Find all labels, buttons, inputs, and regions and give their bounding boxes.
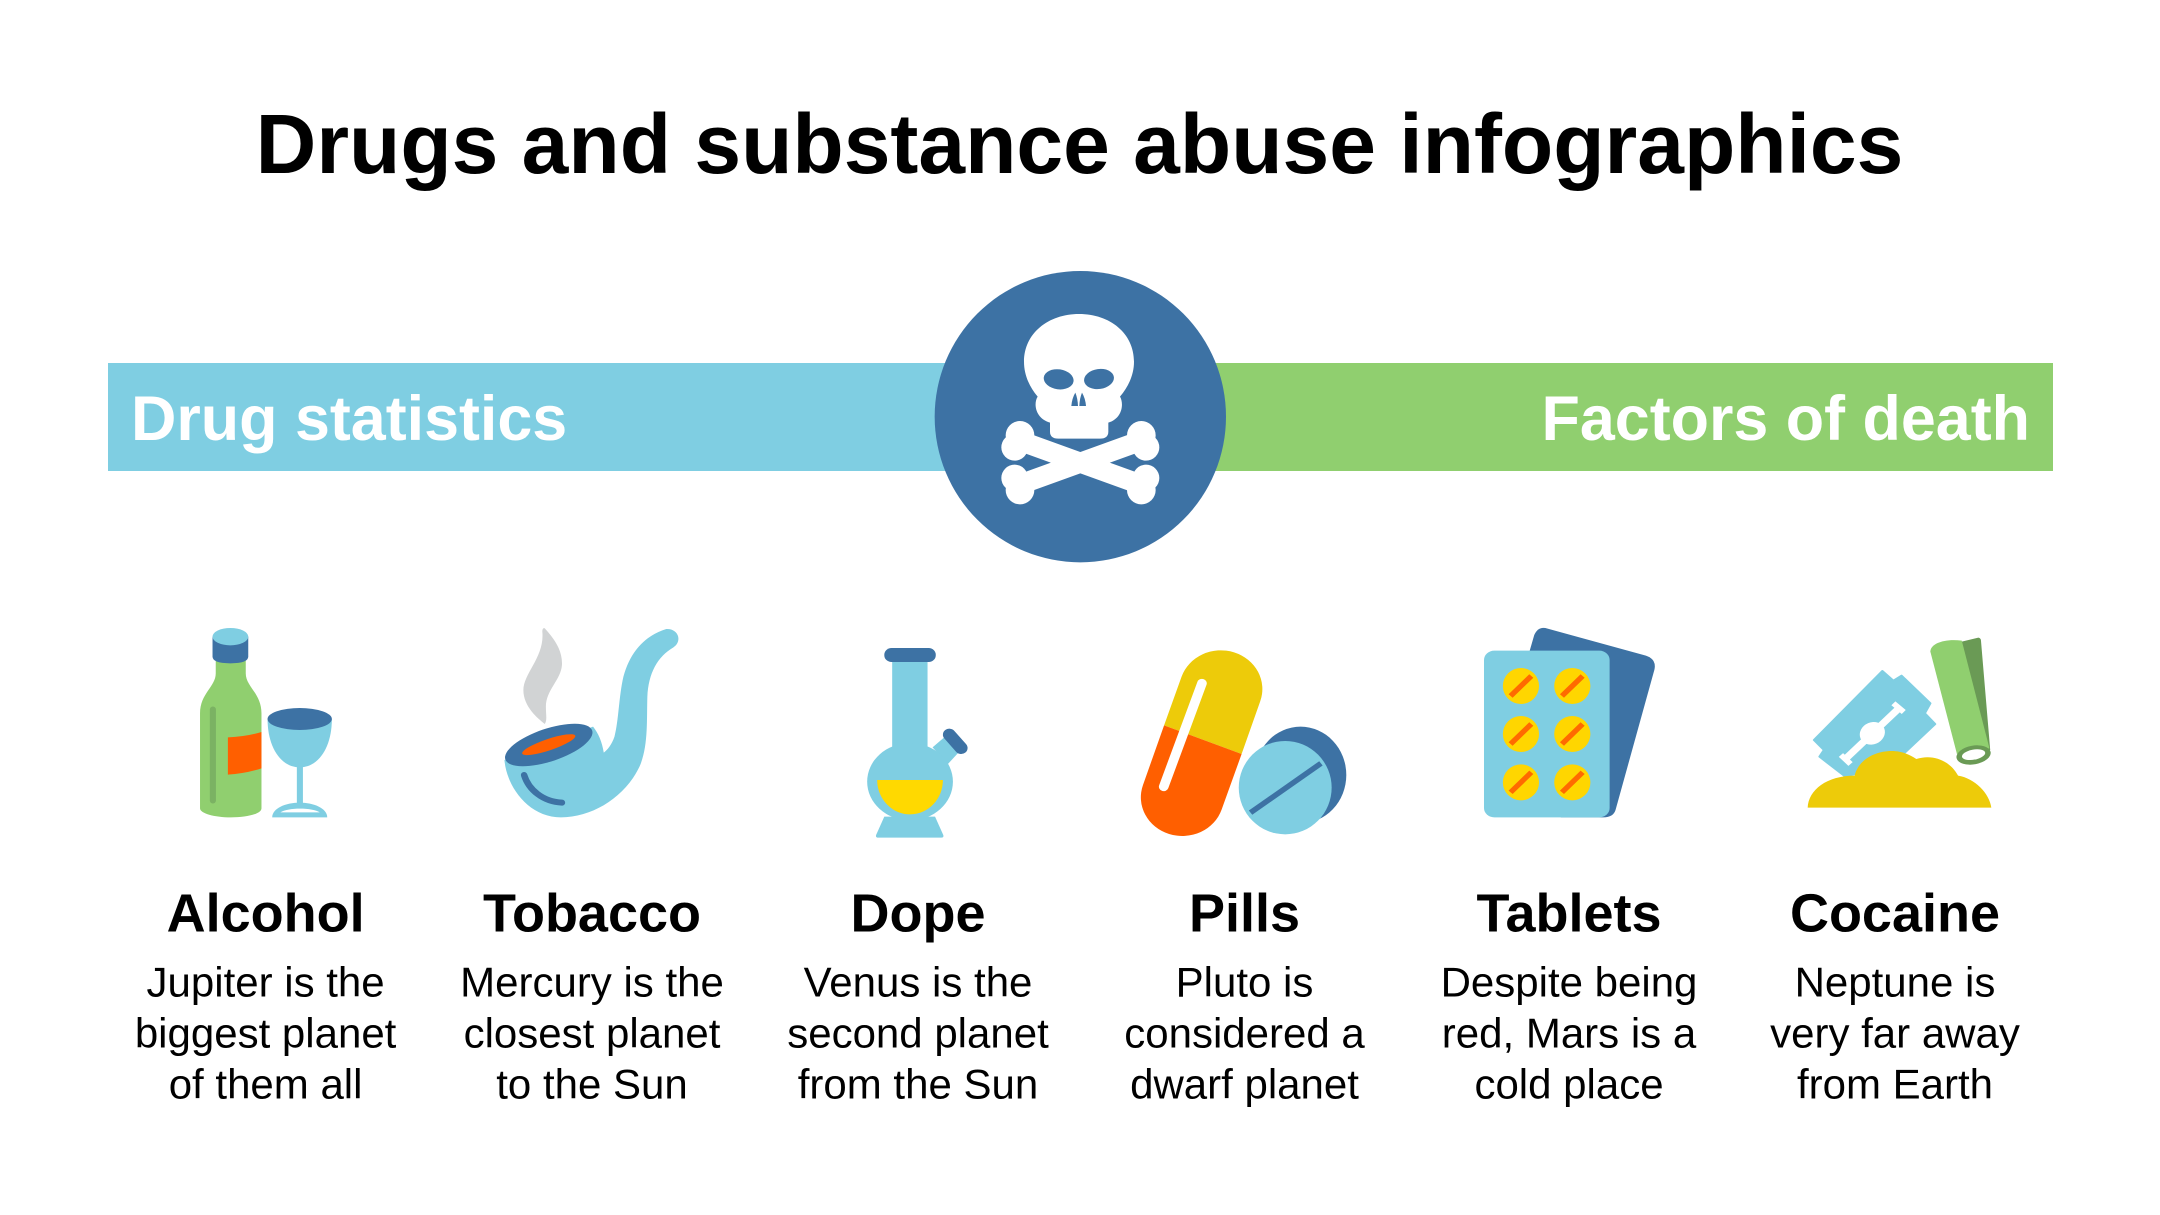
banner: factors of death: Factors of death <box>1542 384 2030 454</box>
column text: cocaine: Cocaine <box>1790 884 2000 944</box>
column text: dope: Dope <box>850 884 986 944</box>
banner: drug statistics <box>108 363 1008 471</box>
column text: tobacco: Mercury is the <box>460 958 724 1006</box>
column text: dope <box>787 884 1049 1108</box>
column text: tobacco: to the Sun <box>496 1060 688 1108</box>
column text: tablets: Despite being <box>1441 958 1697 1006</box>
column text: tobacco: closest planet <box>464 1010 721 1056</box>
banner: factors of death <box>1160 363 2053 471</box>
icon: tobacco pipe <box>499 628 678 817</box>
icon: pills capsule and tablet <box>1141 650 1346 836</box>
column text: cocaine <box>1770 884 2020 1108</box>
column text: alcohol: Jupiter is the <box>147 958 385 1006</box>
column text: tablets: red, Mars is a <box>1442 1010 1697 1056</box>
banner: drug statistics: Drug statistics <box>131 384 567 454</box>
column text: dope: second planet <box>787 1010 1049 1056</box>
icon: tablets blister packs <box>1484 628 1655 817</box>
column text: alcohol: Alcohol <box>167 884 365 944</box>
column text: cocaine: very far away <box>1770 1010 2020 1056</box>
column text: alcohol: of them all <box>169 1060 362 1108</box>
column text: alcohol <box>135 884 397 1108</box>
icon: dope bong <box>867 648 961 838</box>
column text: pills: considered a <box>1124 1010 1365 1056</box>
column text: tobacco <box>460 884 724 1108</box>
column text: pills: dwarf planet <box>1130 1060 1359 1108</box>
column text: alcohol: biggest planet <box>135 1010 397 1056</box>
icon: cocaine razor blade and rolled note <box>1808 638 1993 808</box>
column text: cocaine: Neptune is <box>1795 958 1995 1006</box>
column text: dope: from the Sun <box>798 1060 1038 1108</box>
column text: pills: Pills <box>1189 884 1300 944</box>
icon: skull and crossbones <box>935 271 1226 562</box>
column text: tobacco: Tobacco <box>483 884 701 944</box>
column text: tablets: cold place <box>1474 1060 1664 1108</box>
title: Drugs and substance abuse infographics <box>256 97 1903 191</box>
column text: pills <box>1124 884 1365 1108</box>
column text: tablets: Tablets <box>1476 884 1662 944</box>
icon: alcohol bottle and glass <box>200 628 332 817</box>
column text: tablets <box>1441 884 1697 1108</box>
column text: pills: Pluto is <box>1176 958 1313 1006</box>
column text: cocaine: from Earth <box>1797 1060 1993 1108</box>
column text: dope: Venus is the <box>804 958 1032 1006</box>
